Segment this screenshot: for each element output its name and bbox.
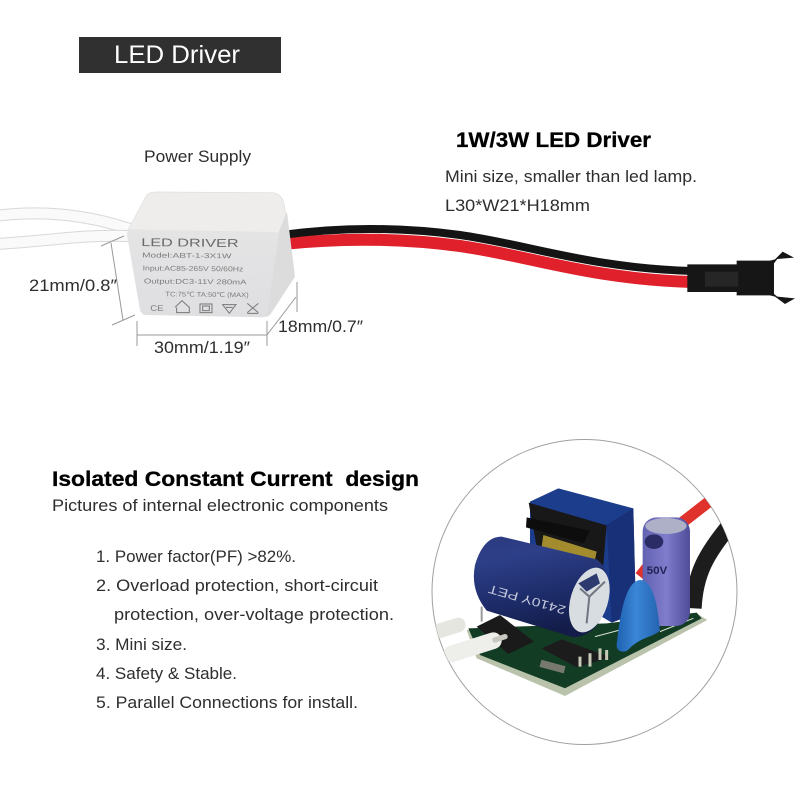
feature list: 1. Power factor(PF) >82%. [96,548,296,566]
label text on box: LED DRIVER [141,237,239,250]
small purple capacitor: 50V [647,565,668,577]
icon: red and black output wires [282,229,692,282]
small purple capacitor [643,517,690,626]
feature list: 5. Parallel Connections for install. [96,694,358,712]
label text on box [141,237,249,314]
circle outline around circuit board [432,440,737,744]
description: size text: L30*W21*H18mm [445,197,590,215]
label text on box: Output:DC3-11V 280mA [144,278,247,286]
feature list: protection, over-voltage protection. [114,606,394,624]
label text on box: CE [150,304,164,313]
compliance icons [175,301,258,313]
box side face [265,212,295,317]
icon: LED driver box [127,192,295,317]
dimension: width 30mm/1.19 [137,321,267,357]
dimension: width 30mm/1.19: 30mm/1.19″ [154,339,250,357]
dimension: depth 18mm/0.7 [267,282,363,336]
feature list: 3. Mini size. [96,636,187,654]
heading: 1W/3W LED Driver: 1W/3W LED Driver [456,129,651,152]
dimension: depth 18mm/0.7: 18mm/0.7″ [278,318,363,336]
label text on box: TC:75℃ TA:50℃ (MAX) [165,291,249,299]
label: Power Supply: Power Supply [144,148,252,166]
black chips [477,615,611,673]
green board [467,613,707,696]
icon: white input wires [0,213,130,244]
feature list [96,548,394,712]
white wires [437,625,505,654]
box front face [127,229,279,317]
description: size text [445,168,697,215]
dimension: height 21mm/0.8 [29,236,135,325]
subheading: internal components: Pictures of internal electronic components [52,497,388,515]
description: size text: Mini size, smaller than led lamp. [445,168,697,186]
ceramic blue capacitor [617,580,660,652]
black wire [693,525,730,608]
label text on box: Input:AC85-265V 50/60Hz [143,265,244,273]
photo: circuit board components [437,488,730,696]
large electrolytic capacitor [474,537,617,637]
large electrolytic capacitor: 2410Y PET [486,581,567,617]
heading bar: LED Driver: LED Driver [114,41,240,69]
red wire [640,498,713,577]
dimension: height 21mm/0.8: 21mm/0.8″ [29,277,117,295]
feature list: 2. Overload protection, short-circuit [96,577,378,595]
heading bar: LED Driver [79,37,281,73]
icon: connector plug [687,252,795,304]
feature list: 4. Safety & Stable. [96,665,237,683]
label text on box: Model:ABT-1-3X1W [142,252,232,260]
heading: Isolated Constant Current design: Isolated Constant Current design [52,468,419,491]
transformer [526,488,636,623]
box top face [128,192,289,235]
